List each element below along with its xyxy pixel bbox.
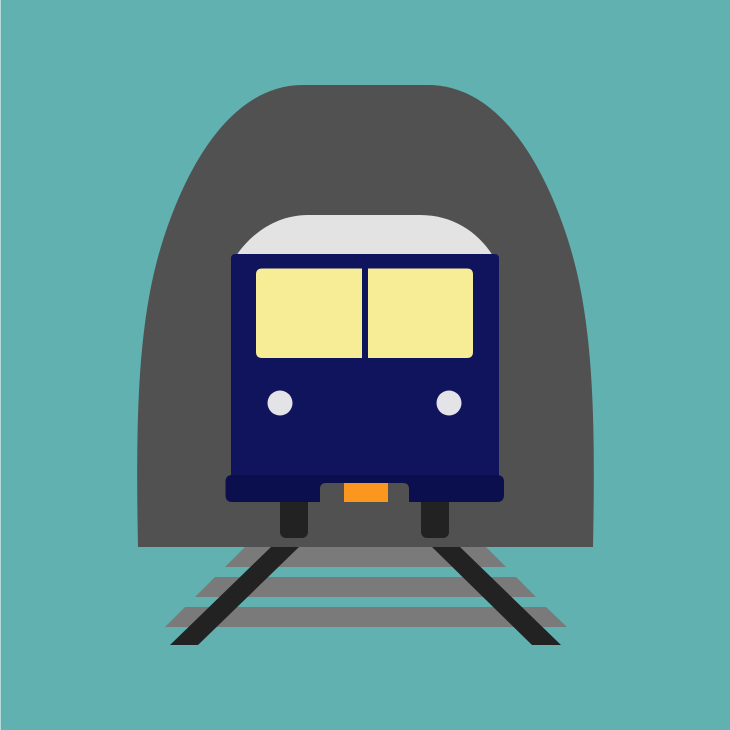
railway rails	[170, 547, 561, 645]
orange plate	[344, 483, 388, 502]
train wheels	[280, 490, 449, 538]
right window	[368, 268, 473, 358]
left window	[256, 268, 362, 358]
train	[226, 215, 504, 502]
tunnel	[137, 85, 594, 547]
railway sleepers	[165, 547, 567, 627]
right headlight	[436, 390, 462, 416]
train roof	[236, 215, 493, 256]
bumper	[226, 475, 504, 502]
train body	[231, 254, 499, 482]
left headlight	[268, 390, 292, 416]
